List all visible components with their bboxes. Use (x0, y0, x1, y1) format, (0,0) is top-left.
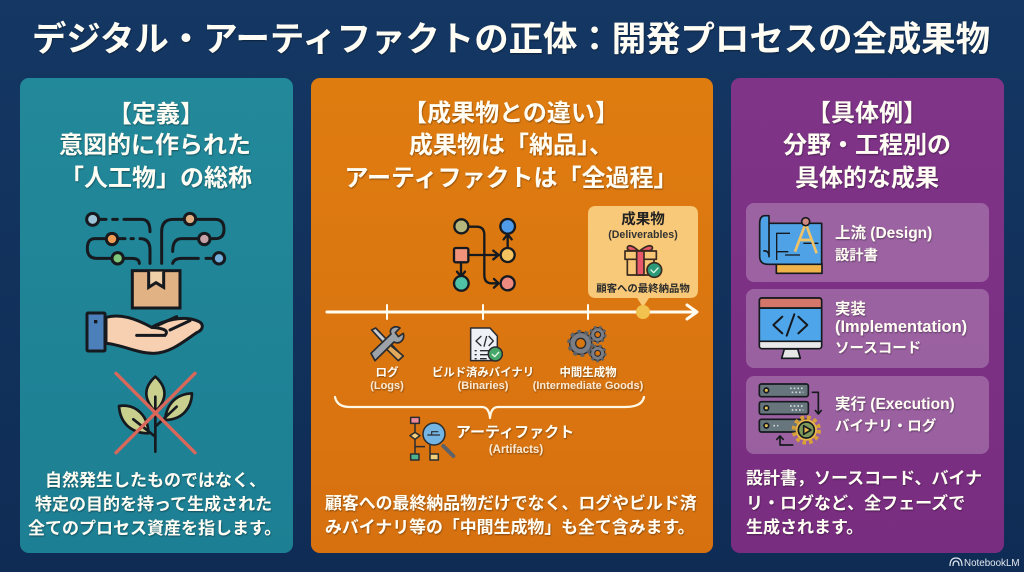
panel: definition (20, 78, 293, 553)
card: design (746, 203, 989, 282)
panel: concrete examples (731, 78, 1004, 553)
body text: definition: 自然発生したものではなく、 (45, 470, 266, 490)
icon: code document with check (471, 328, 502, 361)
heading: examples: 具体的な成果 (795, 165, 939, 192)
label: artifacts: (Artifacts) (489, 444, 543, 456)
callout: deliverables: 成果物 (621, 210, 665, 228)
body text: difference: みバイナリ等の「中間生成物」も全て含みます。 (325, 517, 695, 537)
icon: data streams into box on open hand (87, 213, 225, 453)
callout: deliverables: (Deliverables) (608, 229, 678, 241)
heading: definition: 【定義】 (108, 101, 204, 128)
icon: servers and gear (759, 384, 822, 445)
icon: gears (569, 327, 605, 361)
icon: magnified flowchart (410, 417, 453, 460)
body text: difference: 顧客への最終納品物だけでなく、ログやビルド済 (325, 493, 697, 513)
card: design: 設計書 (835, 246, 878, 264)
card: implementation: 実装 (835, 300, 866, 318)
card: implementation (746, 289, 989, 368)
card: execution: バイナリ・ログ (835, 417, 937, 435)
icon: wrench and screwdriver (371, 327, 404, 361)
heading: examples: 分野・工程別の (783, 132, 951, 159)
heading: difference: 成果物は「納品」、 (409, 132, 613, 159)
watermark: NotebookLM: NotebookLM (964, 558, 1020, 569)
card: implementation: (Implementation) (835, 318, 967, 336)
label: intermediate goods: 中間生成物 (560, 365, 616, 379)
body text: definition: 特定の目的を持って生成された (35, 494, 272, 514)
icon: gift box (625, 246, 662, 277)
icon: process flow (454, 219, 515, 291)
label: binaries: (Binaries) (458, 380, 509, 392)
heading: examples: 【具体例】 (807, 100, 927, 127)
heading: difference: 【成果物との違い】 (403, 100, 619, 127)
panel: difference from deliverables (311, 78, 713, 553)
callout: deliverables (588, 206, 698, 319)
label: artifacts: アーティファクト (456, 424, 574, 441)
title: デジタル・アーティファクトの正体：開発プロセスの全成果物 (32, 20, 990, 59)
heading: definition: 意図的に作られた (59, 132, 251, 159)
body text: examples: リ・ログなど、全フェーズで (746, 493, 965, 513)
label: logs: (Logs) (370, 380, 404, 392)
callout: deliverables: 顧客への最終納品物 (596, 282, 690, 295)
body text: examples: 生成されます。 (746, 517, 863, 537)
body text: definition: 全てのプロセス資産を指します。 (28, 519, 281, 538)
icon: blueprint and compass (760, 216, 822, 273)
label: binaries: ビルド済みバイナリ (432, 365, 534, 379)
heading: difference: アーティファクトは「全過程」 (344, 165, 678, 192)
timeline arrow (327, 305, 697, 319)
label: intermediate goods: (Intermediate Goods) (533, 380, 644, 392)
heading: definition: 「人工物」の総称 (60, 165, 252, 192)
card: execution: 実行 (Execution) (835, 395, 955, 413)
card: execution (746, 376, 989, 454)
body text: examples: 設計書，ソースコード、バイナ (746, 468, 982, 488)
card: design: 上流 (Design) (835, 224, 932, 242)
card: implementation: ソースコード (835, 341, 921, 357)
icon: monitor with code (759, 298, 822, 358)
brace (335, 397, 644, 418)
label: logs: ログ (376, 365, 399, 379)
